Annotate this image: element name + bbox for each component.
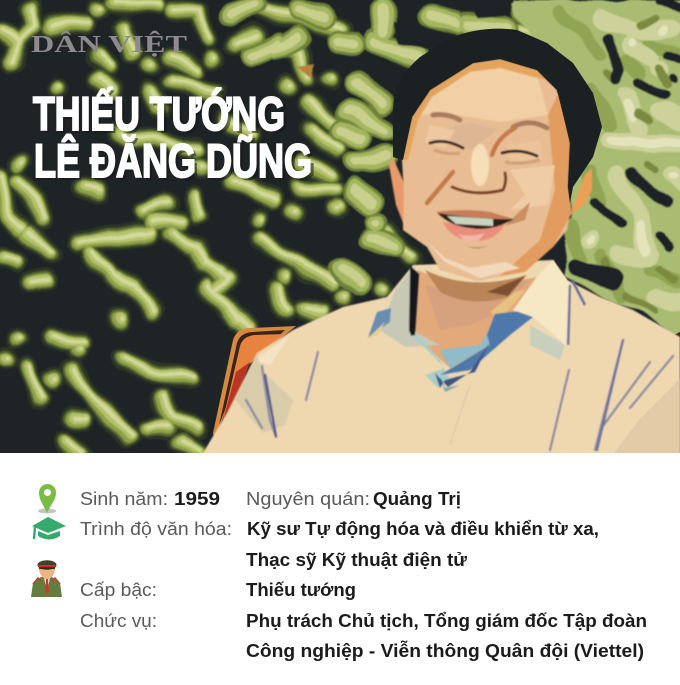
icon: soldier xyxy=(31,560,62,597)
icon: graduation cap xyxy=(32,517,66,540)
hometown: Nguyên quán: xyxy=(246,489,370,509)
hometown xyxy=(246,489,461,509)
position xyxy=(80,611,647,661)
title: THIẾU TƯỚNG xyxy=(33,87,285,140)
education xyxy=(80,519,599,570)
icon: location pin xyxy=(38,484,56,514)
portrait: hair xyxy=(393,29,602,203)
title: LÊ ĐĂNG DŨNG xyxy=(34,134,312,187)
mouth xyxy=(436,210,513,220)
education: Kỹ sư Tự động hóa và điều khiển từ xa, xyxy=(247,519,599,539)
portrait: collar xyxy=(368,260,585,392)
chair xyxy=(213,326,680,440)
rank: Thiếu tướng xyxy=(246,580,356,600)
portrait: ears xyxy=(389,158,592,225)
birth year: 1959 xyxy=(174,489,220,509)
education: Thạc sỹ Kỹ thuật điện tử xyxy=(246,550,468,570)
position: Phụ trách Chủ tịch, Tổng giám đốc Tập đoàn xyxy=(246,611,647,631)
rank: Cấp bậc: xyxy=(80,580,157,600)
camouflage foliage xyxy=(0,0,680,453)
portrait: face xyxy=(402,59,572,281)
birth year xyxy=(80,489,220,509)
rank xyxy=(80,580,356,600)
portrait: neck xyxy=(412,270,537,368)
birth year: Sinh năm: xyxy=(80,489,168,509)
background photo illustration xyxy=(0,0,680,455)
position: Chức vụ: xyxy=(80,611,157,631)
title: LÊ ĐĂNG DŨNG xyxy=(36,137,316,190)
title xyxy=(33,87,316,190)
education: Trình độ văn hóa: xyxy=(80,519,232,539)
hometown: Quảng Trị xyxy=(373,489,461,509)
portrait: shirt xyxy=(203,260,680,455)
title: THIẾU TƯỚNG xyxy=(35,90,289,143)
logo: Dân Việt: DÂN VIỆT xyxy=(31,31,187,58)
brows and eyes xyxy=(433,115,547,128)
position: Công nghiệp - Viễn thông Quân đội (Viettel) xyxy=(246,640,644,661)
info block xyxy=(80,489,647,661)
